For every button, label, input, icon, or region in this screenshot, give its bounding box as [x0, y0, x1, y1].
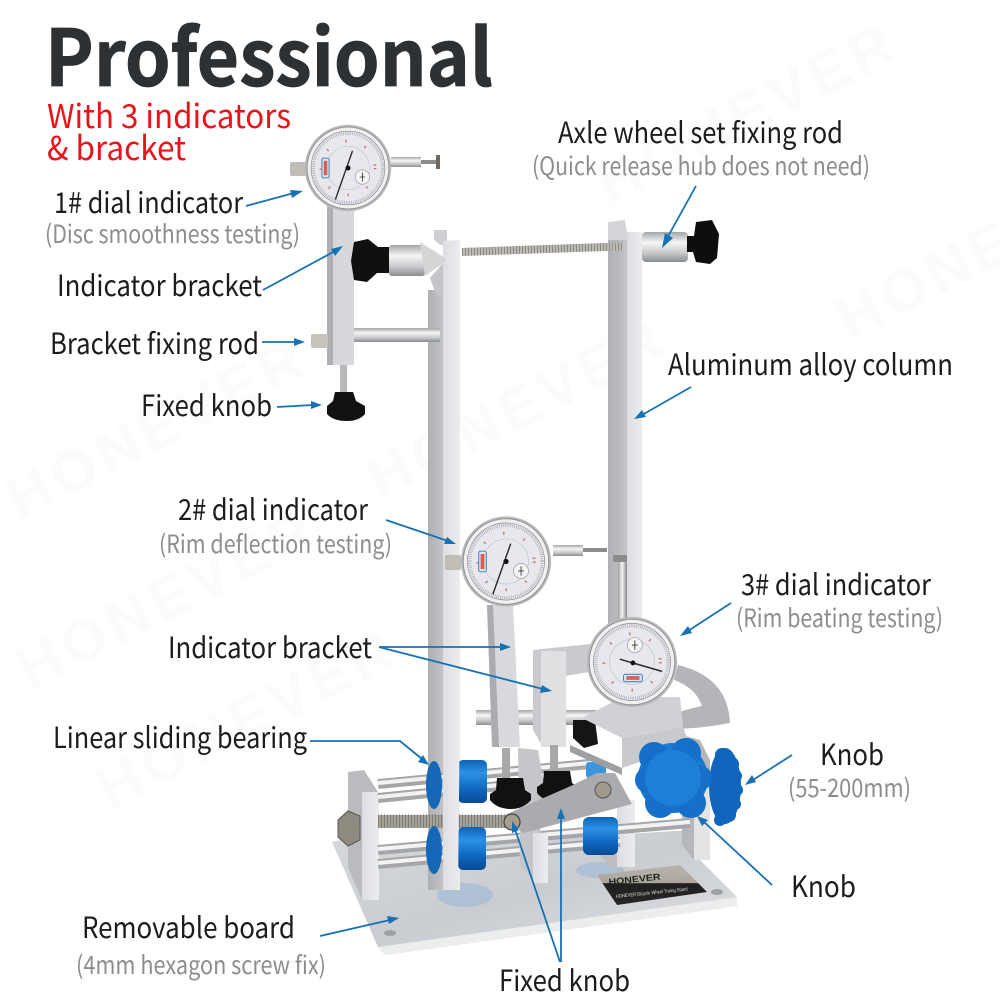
left column: [428, 230, 460, 890]
label: 3# dial indicator: [680, 562, 943, 636]
indicator bracket 2: [487, 605, 520, 747]
label: 1# dial indicator: [45, 180, 303, 251]
label: removable board: Removable board: [82, 905, 295, 947]
indicator bracket 3: [533, 644, 590, 747]
label: indicator bracket lower: [168, 625, 552, 693]
left axle knob: [351, 239, 445, 282]
dial 3 mounting block: [570, 697, 690, 775]
blue bearings: [426, 760, 618, 874]
label: bracket fixing rod: Bracket fixing rod: [50, 321, 259, 363]
label: axle wheel set fixing rod: Axle wheel set fixing rod: [558, 110, 843, 152]
left end plate: [348, 770, 379, 900]
bracket fixing rod: [311, 328, 440, 348]
watermarks: HONEVER: [86, 614, 409, 822]
label: removable board: [76, 905, 399, 982]
brand plate: [597, 865, 707, 905]
subtitle: & bracket: [47, 122, 186, 170]
label: 3# dial indicator: (Rim beating testing): [736, 599, 943, 635]
rear transverse rod: [476, 710, 610, 725]
label: fixed knob lower: [499, 808, 630, 1000]
truing stand illustration: [290, 125, 743, 955]
label: knob lower: [697, 816, 856, 906]
label: indicator bracket upper: [57, 246, 343, 305]
brand plate: HONEVER: [608, 872, 661, 887]
dial indicator 3: [587, 555, 677, 707]
label: axle wheel set fixing rod: (Quick release hub does not need): [532, 147, 870, 183]
label: fixed knob upper: Fixed knob: [141, 383, 272, 425]
right axle knob: [642, 220, 719, 264]
threaded axle rod: [462, 242, 622, 256]
repeated front of left column over bearings: [443, 700, 460, 890]
rods and cylinders lower assembly: [338, 762, 690, 864]
label: fixed knob lower: Fixed knob: [499, 958, 630, 1000]
label: linear sliding bearing: [53, 715, 429, 765]
rear blue knob: [709, 748, 743, 826]
subtitle: With 3 indicators: [47, 90, 291, 138]
title: Professional: [45, 0, 493, 109]
large blue knob: [635, 738, 712, 818]
dial indicator 2: [445, 516, 607, 607]
rear uprights: [608, 220, 642, 867]
label: 2# dial indicator: 2# dial indicator: [178, 487, 369, 529]
mid uprights: [518, 748, 617, 883]
curved arm behind dial 3: [668, 665, 730, 729]
clamp arm: [504, 773, 632, 833]
label: knob 55-200mm: Knob: [820, 732, 884, 774]
label: aluminum alloy column: [634, 342, 953, 419]
indicator bracket 1: [327, 205, 354, 365]
watermarks: HONEVER: [6, 494, 329, 702]
right end plate: [682, 735, 710, 860]
black knob behind clamp: [573, 720, 598, 748]
label: knob 55-200mm: (55-200mm): [788, 769, 911, 805]
label: aluminum alloy column: Aluminum alloy column: [668, 342, 953, 384]
label: 2# dial indicator: [159, 487, 456, 561]
base plate: [332, 830, 737, 955]
watermarks: HONEVER: [586, 9, 909, 217]
lower fixed knob: [327, 365, 365, 421]
label: indicator bracket upper: Indicator bracket: [57, 263, 262, 305]
label: indicator bracket lower: Indicator bracket: [168, 625, 372, 667]
label: knob lower: Knob: [791, 864, 856, 906]
watermarks: HONEVER: [0, 324, 319, 532]
watermarks: HONEVER: [356, 304, 679, 512]
fixed knobs: [490, 745, 578, 809]
label: knob 55-200mm: [745, 732, 911, 805]
label: removable board: (4mm hexagon screw fix): [76, 946, 326, 982]
brand plate: HONEVER Bicycle Wheel Truing Stand: [616, 886, 688, 900]
label: 1# dial indicator: 1# dial indicator: [54, 180, 244, 222]
label: 3# dial indicator: 3# dial indicator: [741, 562, 932, 604]
label: axle wheel set fixing rod: [532, 110, 870, 248]
dial indicator 1: [290, 125, 440, 211]
label: linear sliding bearing: Linear sliding bearing: [53, 715, 307, 757]
subtitle: [47, 90, 291, 170]
label: 1# dial indicator: (Disc smoothness testing): [45, 215, 300, 251]
label: 2# dial indicator: (Rim deflection testing): [159, 525, 392, 561]
